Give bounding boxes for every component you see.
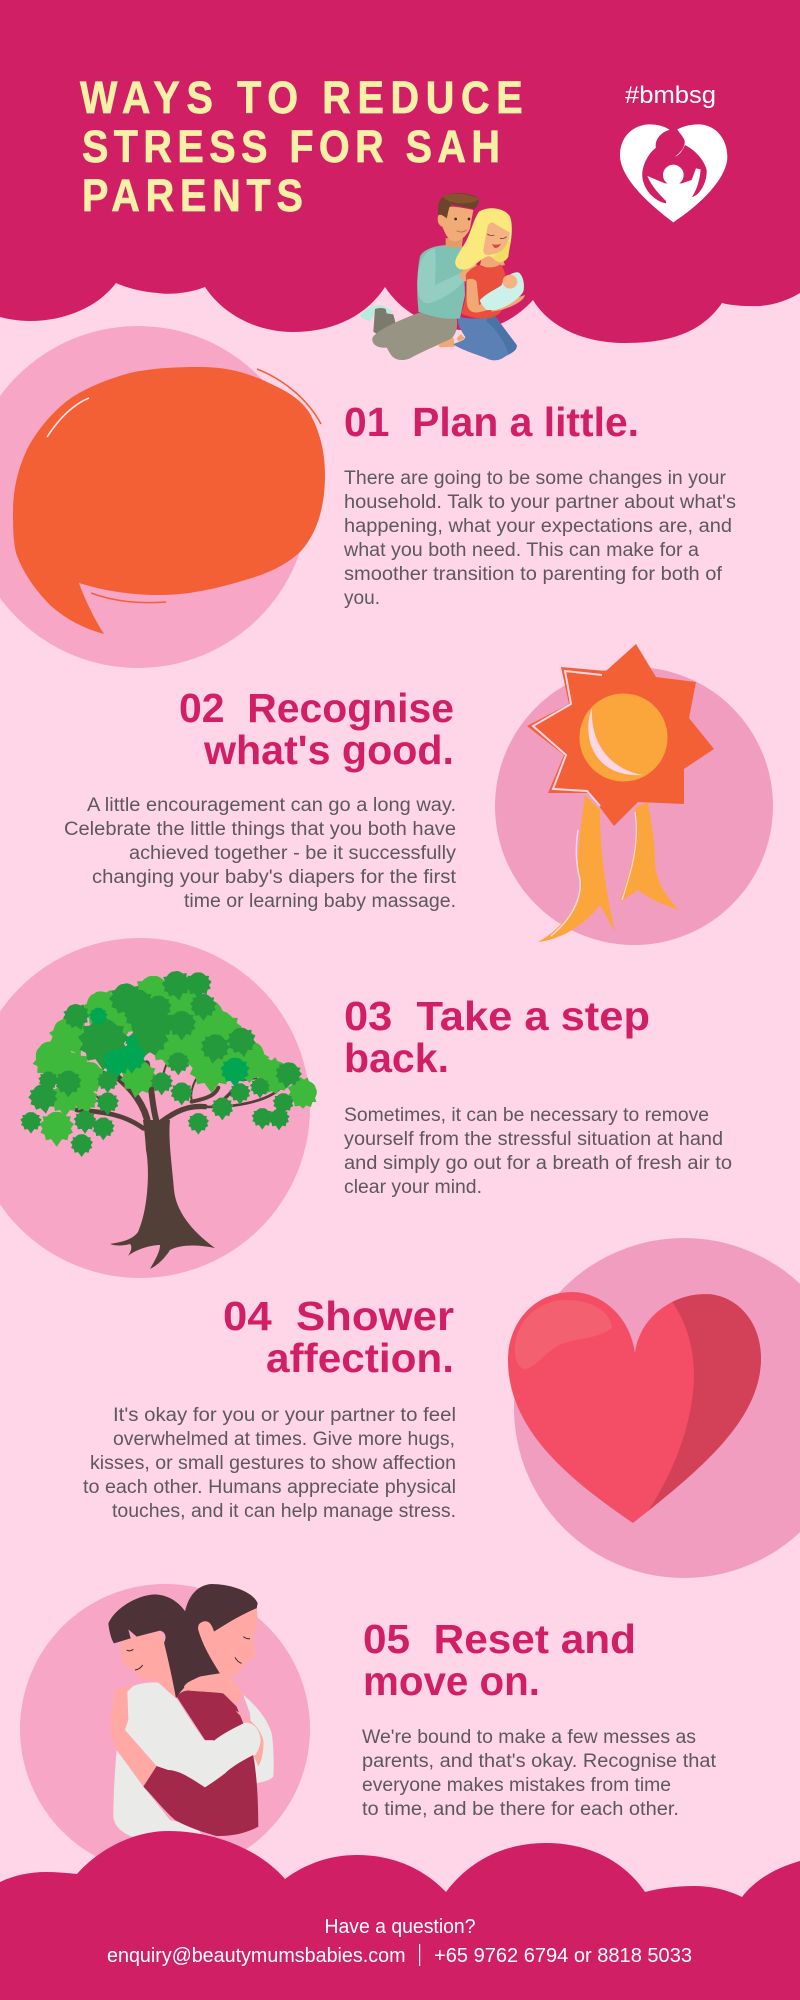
circle backdrop 5 — [20, 1584, 310, 1874]
icon: rosette medal — [527, 644, 714, 942]
circle backdrop 1 — [0, 326, 309, 668]
text: body 03: Sometimes, it can be necessary to remove — [344, 1105, 709, 1126]
text: body 04: to each other. Humans appreciate physical — [83, 1477, 456, 1498]
heading 05 — [363, 1616, 636, 1704]
footer contact text: enquiry@beautymumsbabies.com — [107, 1945, 406, 1967]
text: body 05: everyone makes mistakes from time — [362, 1775, 671, 1796]
circle backdrop 2 — [495, 667, 773, 945]
text: body 02: A little encouragement can go a long way. — [87, 795, 456, 816]
title — [80, 73, 523, 221]
heading 02: 02 Recognise — [179, 685, 454, 731]
text: body 04: overwhelmed at times. Give more hugs, — [113, 1429, 455, 1450]
text: body 05: parents, and that's okay. Recognise that — [362, 1751, 717, 1772]
text: body 02: time or learning baby massage. — [184, 891, 456, 912]
text: body 01: happening, what your expectations are, and — [344, 516, 732, 537]
footer contact text: Have a question? — [324, 1916, 476, 1938]
text: body 05: to time, and be there for each other. — [362, 1799, 679, 1820]
text: body 05: We're bound to make a few messes as — [362, 1727, 696, 1748]
heading 04 — [223, 1293, 454, 1381]
text: body 01: you. — [344, 588, 380, 609]
text: body 02 — [64, 795, 457, 912]
text: body 04: kisses, or small gestures to show affection — [90, 1453, 456, 1474]
text: body 01: There are going to be some changes in your — [344, 468, 727, 489]
heading 04: affection. — [266, 1335, 454, 1381]
footer banner — [0, 1831, 800, 2000]
text: body 03: yourself from the stressful situation at hand — [344, 1129, 723, 1150]
text: body 04: It's okay for you or your partner to feel — [113, 1405, 456, 1426]
text: body 03 — [344, 1105, 732, 1198]
text: body 04 — [83, 1405, 456, 1522]
hashtag: #bmbsg — [625, 82, 716, 109]
circle backdrop 4 — [514, 1238, 800, 1578]
icon: logo heart — [620, 124, 727, 222]
title: STRESS FOR SAH — [82, 122, 500, 172]
footer contact text — [107, 1916, 692, 1967]
footer contact text: +65 9762 6794 or 8818 5033 — [434, 1945, 692, 1967]
icon: speech bubble — [13, 367, 325, 634]
icon: heart — [508, 1292, 761, 1523]
text: body 01: household. Talk to your partner about what's — [344, 492, 736, 513]
heading 01: 01 Plan a little. — [344, 399, 639, 445]
panel: 02 recognise what's good — [64, 644, 773, 945]
text: body 03: clear your mind. — [344, 1177, 482, 1198]
panel: 05 reset and move on — [20, 1584, 717, 1874]
heading 02: what's good. — [203, 727, 454, 773]
text: body 03: and simply go out for a breath of fresh air to — [344, 1153, 732, 1174]
text: body 01: what you both need. This can make for a — [343, 540, 699, 561]
title: PARENTS — [82, 171, 303, 221]
icon: tree — [20, 969, 321, 1269]
heading 05: 05 Reset and — [363, 1616, 636, 1662]
text: body 04: touches, and it can help manage stress. — [112, 1501, 456, 1522]
header banner — [0, 0, 800, 343]
text: body 02: Celebrate the little things that you both have — [64, 819, 456, 840]
text: body 01 — [343, 468, 736, 609]
text: body 01: smoother transition to parenting for both of — [344, 564, 723, 585]
heading 03: 03 Take a step — [344, 993, 650, 1039]
panel: 04 shower affection — [83, 1238, 800, 1578]
illustration: hugging couple — [108, 1584, 274, 1837]
heading 03 — [344, 993, 650, 1081]
illustration: couple with baby — [360, 193, 525, 360]
heading 04: 04 Shower — [223, 1293, 454, 1339]
title: WAYS TO REDUCE — [80, 73, 523, 123]
heading 05: move on. — [363, 1658, 540, 1704]
text: body 02: achieved together - be it successfully — [129, 843, 457, 864]
heading 02 — [179, 685, 454, 773]
text: body 05 — [362, 1727, 717, 1820]
text: body 02: changing your baby's diapers for the first — [92, 867, 457, 888]
panel: 03 take a step back — [0, 938, 732, 1278]
circle backdrop 3 — [0, 938, 310, 1278]
panel: 01 plan a little — [0, 326, 736, 668]
heading 03: back. — [344, 1035, 449, 1081]
